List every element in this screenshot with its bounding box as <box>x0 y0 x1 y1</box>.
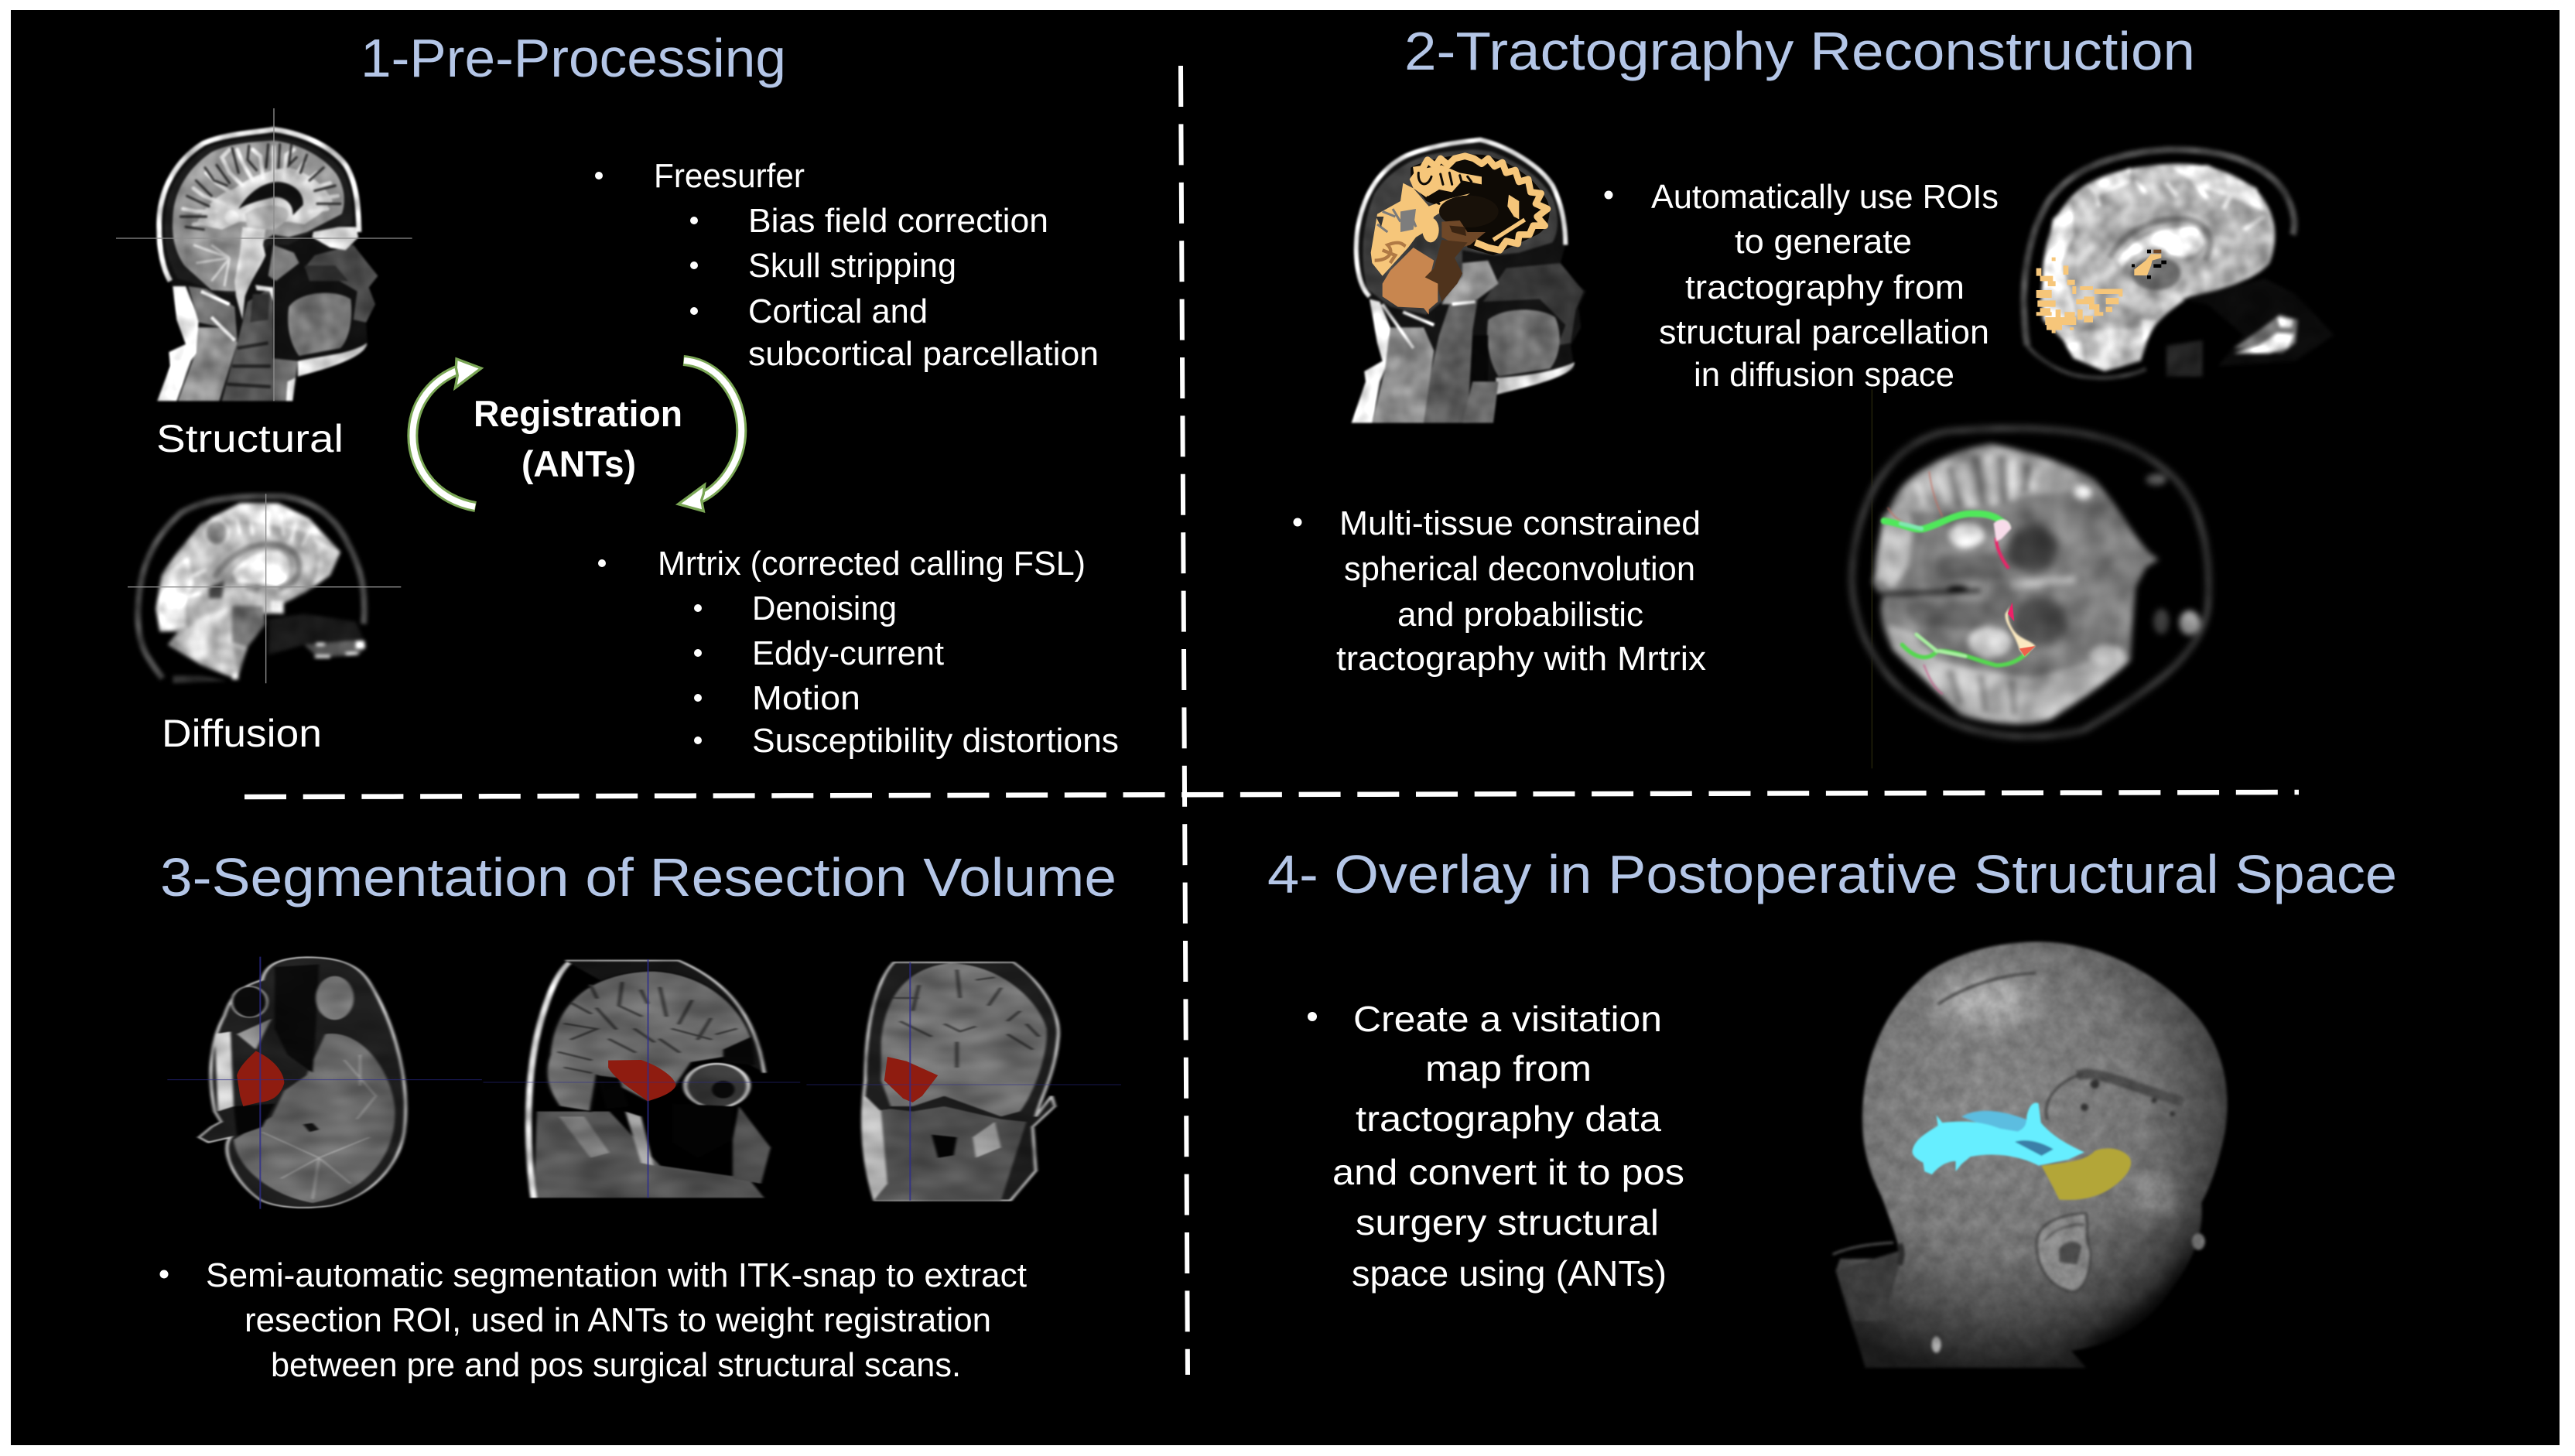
text block: automatically use ROIs: tractography from <box>1685 268 1965 306</box>
text block: multi-tissue CSD: tractography with Mrtrix <box>1336 640 1706 678</box>
image: diffusion MRI head <box>128 494 401 683</box>
image: structural MRI head <box>116 108 412 401</box>
image: sagittal view <box>483 959 800 1198</box>
text block: mrtrix list <box>598 545 1119 760</box>
label: registration (ANTs): (ANTs) <box>521 443 636 484</box>
heading: pre-processing: 1-Pre-Processing <box>361 28 786 88</box>
text block: automatically use ROIs: structural parcellation <box>1659 313 1989 351</box>
panel: 3 segmentation <box>159 847 1121 1384</box>
arrow: right arc down <box>679 361 741 511</box>
text block: multi-tissue CSD: Multi-tissue constrained <box>1339 504 1701 542</box>
text block: create a visitation map: tractography data <box>1356 1099 1661 1139</box>
text block: create a visitation map: map from <box>1425 1048 1592 1089</box>
ear <box>2036 1213 2091 1291</box>
text block: create a visitation map: and convert it to pos <box>1332 1152 1684 1192</box>
image: three MRI views with red resection <box>167 957 1121 1209</box>
text block: semi-automatic segmentation: between pre and pos surgical structural scans. <box>271 1346 961 1384</box>
label: structural: Structural <box>156 417 344 460</box>
text block: automatically use ROIs: in diffusion space <box>1694 356 1954 394</box>
text block: freesurfer list <box>595 157 1099 373</box>
panel: 4 overlay <box>1267 844 2397 1368</box>
heading: segmentation of resection volume: 3-Segmentation of Resection Volume <box>160 847 1117 907</box>
text block: semi-automatic segmentation <box>159 1256 1027 1384</box>
text block: freesurfer list: Freesurfer <box>654 157 805 195</box>
panel: 2 tractography reconstruction <box>1294 21 2334 768</box>
arrow: left arc up <box>412 359 481 507</box>
text block: semi-automatic segmentation: Semi-automatic segmentation with ITK-snap to extract <box>206 1256 1027 1294</box>
text block: semi-automatic segmentation: resection ROI, used in ANTs to weight registration <box>245 1301 991 1339</box>
text block: freesurfer list: Cortical and <box>748 292 928 330</box>
image: axial diffusion with tractography <box>1852 389 2209 768</box>
arrows: registration cycle <box>412 359 741 511</box>
text block: multi-tissue CSD: spherical deconvolution <box>1344 550 1695 588</box>
text block: create a visitation map: surgery structural <box>1356 1202 1659 1242</box>
text block: create a visitation map: space using (ANTs) <box>1352 1253 1667 1294</box>
resection volume overlay <box>2042 1148 2131 1200</box>
text block: automatically use ROIs: to generate <box>1735 223 1912 261</box>
image: axial view <box>167 957 482 1209</box>
text block: freesurfer list: Skull stripping <box>748 247 956 285</box>
text block: mrtrix list: Denoising <box>752 590 897 627</box>
text block: mrtrix list: Eddy-current <box>752 634 944 672</box>
text block: automatically use ROIs <box>1605 178 1999 394</box>
text block: multi-tissue CSD <box>1294 504 1706 678</box>
heading: tractography reconstruction: 2-Tractography Reconstruction <box>1404 21 2195 81</box>
vertical dashed divider <box>1181 66 1188 1375</box>
text block: mrtrix list: Susceptibility distortions <box>752 722 1119 760</box>
image: 3D head render with overlays <box>1833 942 2228 1368</box>
text block: create a visitation map <box>1308 999 1684 1294</box>
panel: 1 pre-processing <box>116 28 1119 760</box>
label: registration (ANTs) <box>474 393 682 484</box>
text block: create a visitation map: Create a visitation <box>1353 999 1662 1039</box>
text block: freesurfer list: subcortical parcellation <box>748 335 1099 373</box>
image: diffusion with ROI overlay <box>2024 149 2334 378</box>
text block: multi-tissue CSD: and probabilistic <box>1397 596 1643 634</box>
text block: freesurfer list: Bias field correction <box>748 202 1048 240</box>
fibre tracts <box>1884 472 2027 694</box>
tract visitation map overlay <box>1913 1102 2084 1174</box>
label: registration (ANTs): Registration <box>474 393 682 434</box>
label: diffusion: Diffusion <box>162 712 322 755</box>
heading: overlay in postoperative structural space: 4- Overlay in Postoperative Structural Space <box>1267 844 2397 904</box>
text block: automatically use ROIs: Automatically use ROIs <box>1651 178 1999 216</box>
text block: mrtrix list: Mrtrix (corrected calling FSL) <box>658 545 1086 583</box>
image: parcellated structural head <box>1352 140 1586 423</box>
text block: mrtrix list: Motion <box>752 679 860 717</box>
image: coronal view <box>806 962 1121 1201</box>
horizontal dashed divider <box>245 792 2299 797</box>
